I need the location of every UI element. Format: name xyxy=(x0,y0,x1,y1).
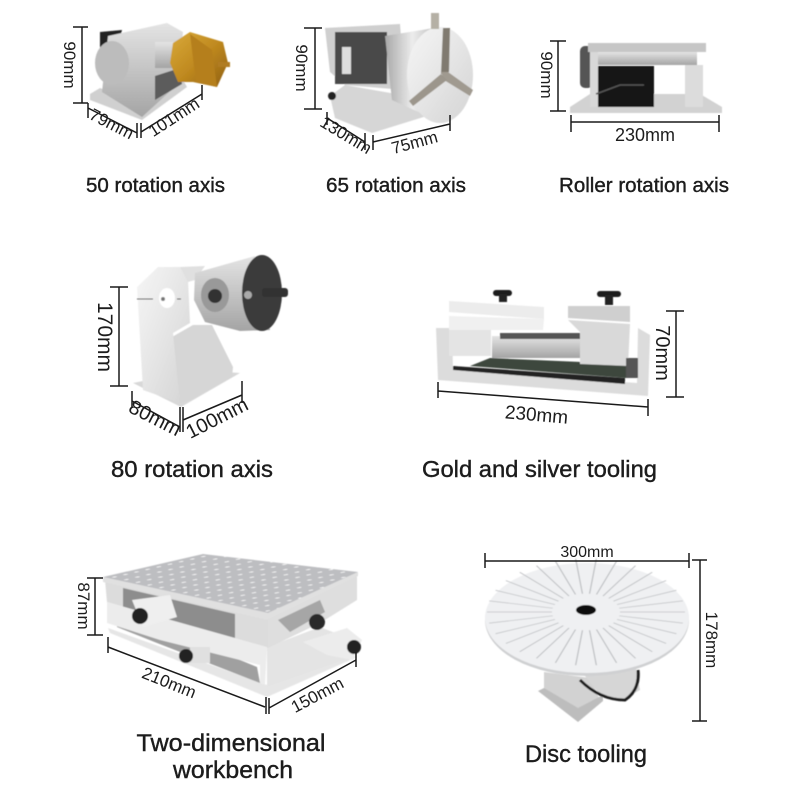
dimension: 79mm: 79mm xyxy=(86,105,137,143)
device: two-dimensional workbench xyxy=(103,554,362,697)
dimension: 178mm height xyxy=(692,560,721,721)
dimension: 230mm xyxy=(571,115,719,145)
dimension: 230mm: 230mm xyxy=(504,402,569,429)
device: 50 rotation axis xyxy=(90,23,230,120)
caption: disc tooling: Disc tooling xyxy=(525,741,647,768)
caption: 50 rotation axis: 50 rotation axis xyxy=(86,175,225,197)
caption: two-dimensional workbench: Two-dimensional xyxy=(136,730,326,757)
dimension: 300mm width: 300mm xyxy=(560,544,614,561)
panel: two-dimensional workbench xyxy=(74,554,362,784)
dimension: 150mm xyxy=(269,652,356,717)
dimension: 75mm xyxy=(373,115,450,158)
dimension: 90mm height xyxy=(537,41,566,111)
dimension: 90mm height xyxy=(292,28,322,109)
device: disc tooling xyxy=(485,559,689,722)
dimension: 90mm height: 90mm xyxy=(60,41,79,89)
dimension: 100mm: 100mm xyxy=(183,394,252,444)
device: 80 rotation axis xyxy=(133,255,288,407)
device: gold and silver tooling xyxy=(436,290,650,396)
dimension: 150mm: 150mm xyxy=(288,673,347,717)
caption: 80 rotation axis: 80 rotation axis xyxy=(111,456,273,482)
dimension: 90mm height: 90mm xyxy=(292,44,311,92)
dimension: 230mm: 230mm xyxy=(615,125,675,145)
panel: roller rotation axis xyxy=(537,41,729,197)
caption: two-dimensional workbench: workbench xyxy=(172,757,293,784)
device: 65 rotation axis xyxy=(325,13,473,133)
device: roller rotation axis xyxy=(570,43,722,113)
dimension: 87mm height xyxy=(74,578,103,635)
dimension: 87mm height: 87mm xyxy=(74,582,93,630)
dimension: 210mm: 210mm xyxy=(139,663,199,702)
dimension: 170mm height: 170mm xyxy=(93,302,116,372)
caption: 65 rotation axis: 65 rotation axis xyxy=(326,175,466,197)
dimension: 75mm: 75mm xyxy=(389,127,440,158)
dimension: 101mm: 101mm xyxy=(145,94,203,141)
panel: 50 rotation axis xyxy=(60,23,230,197)
panel: gold and silver tooling xyxy=(422,290,684,482)
dimension: 70mm height xyxy=(651,311,684,397)
dimension: 70mm height: 70mm xyxy=(651,325,673,381)
dimension: 130mm: 130mm xyxy=(317,113,375,158)
dimension: 178mm height: 178mm xyxy=(702,612,721,668)
panel: disc tooling xyxy=(485,544,721,768)
dimension: 210mm xyxy=(108,637,266,714)
panel: 80 rotation axis xyxy=(93,255,288,482)
caption: two-dimensional workbench xyxy=(136,730,326,784)
caption: gold and silver tooling: Gold and silver tooling xyxy=(422,456,657,482)
dimension: 170mm height xyxy=(93,287,128,386)
dimension: 300mm width xyxy=(485,544,689,568)
panel: 65 rotation axis xyxy=(292,13,473,197)
dimension: 80mm: 80mm xyxy=(125,396,184,441)
dimension: 230mm xyxy=(438,382,648,429)
dimension: 90mm height: 90mm xyxy=(537,51,556,99)
caption: roller rotation axis: Roller rotation axis xyxy=(559,175,729,197)
dimension: 90mm height xyxy=(60,27,88,103)
